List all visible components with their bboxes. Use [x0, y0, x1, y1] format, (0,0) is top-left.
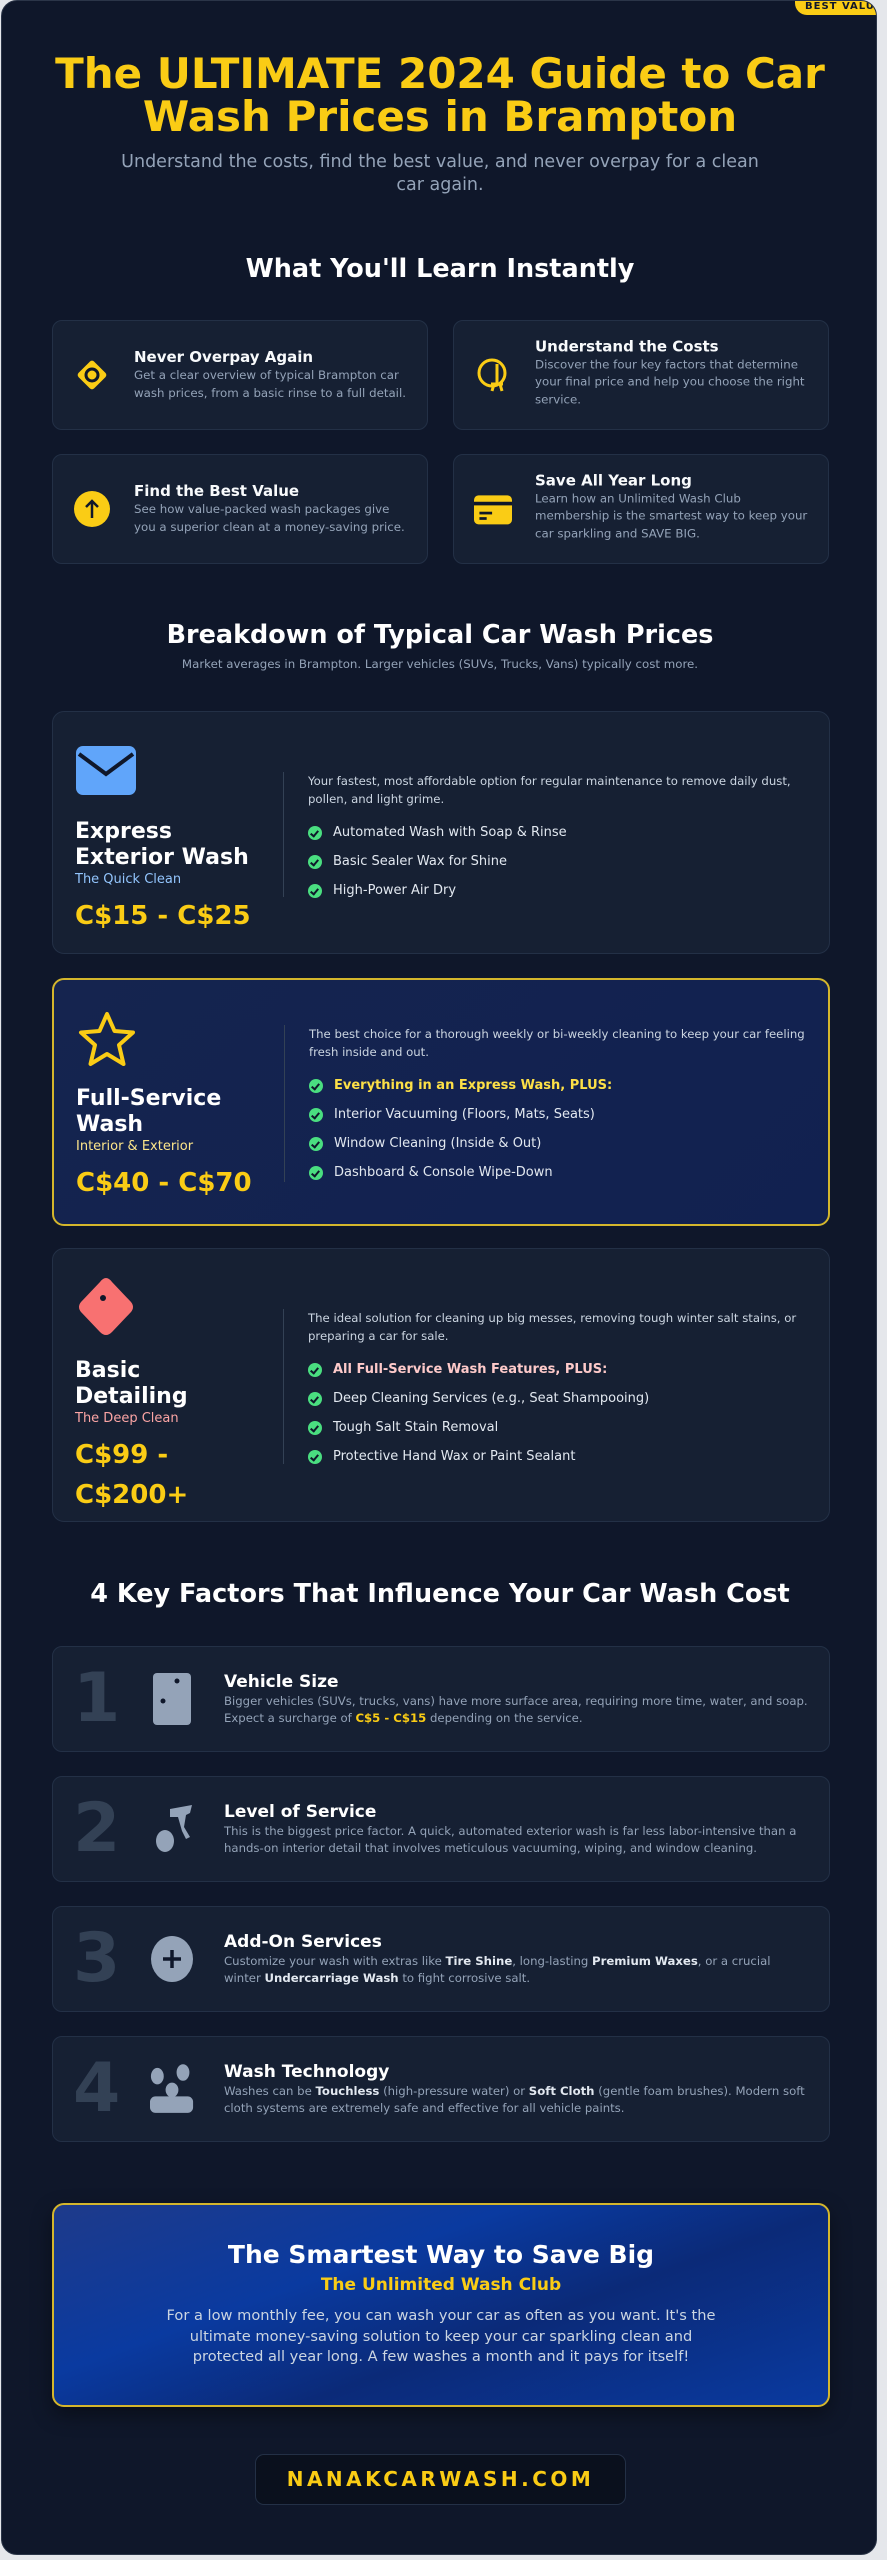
feature card: best value: you a superior clean at a money-saving price.	[134, 520, 405, 534]
factor 4: technology	[52, 2036, 830, 2142]
price card: detailing: Detailing	[75, 1384, 188, 1409]
feature card: save all year: car sparkling and SAVE BIG.	[535, 526, 700, 540]
heading: key factors: 4 Key Factors That Influence Your Car Wash Cost	[90, 1579, 790, 1609]
price card: express: Your fastest, most affordable option for regular maintenance to remove daily dust,	[308, 774, 791, 788]
feature card: understand costs: Discover the four key factors that determine	[535, 357, 798, 371]
price card: express: Express	[75, 819, 172, 844]
footer: website	[255, 2454, 626, 2505]
price card: detailing: Protective Hand Wax or Paint Sealant	[333, 1449, 575, 1464]
price card: express: Basic Sealer Wax for Shine	[333, 854, 507, 869]
feature card: save all year: membership is the smartest way to keep your	[535, 509, 807, 523]
price card: full-service: Everything in an Express Wash, PLUS:	[334, 1078, 612, 1093]
factor 2: level of service: Level of Service	[224, 1802, 376, 1822]
factor 3: add-ons	[52, 1906, 830, 2012]
title: Wash Prices in Brampton	[143, 92, 737, 141]
factor 4: technology: cloth systems are extremely safe and effective for all vehicle paints.	[224, 2101, 624, 2115]
price card: express: Automated Wash with Soap & Rinse	[333, 825, 567, 840]
feature card: save all year: Learn how an Unlimited Wash Club	[535, 491, 741, 505]
price card: detailing: Basic	[75, 1358, 140, 1383]
icon: tag diamond	[79, 1278, 133, 1335]
section subtitle: Market averages in Brampton. Larger vehicles (SUVs, Trucks, Vans) typically cost more.	[182, 657, 698, 671]
price card: full-service: C$40 - C$70	[76, 1168, 252, 1198]
feature card: understand costs: service.	[535, 392, 581, 406]
feature card: never overpay	[52, 320, 428, 430]
factor 1: vehicle size: Vehicle Size	[224, 1672, 339, 1692]
price card: detailing: Deep Cleaning Services (e.g., Seat Shampooing)	[333, 1391, 649, 1406]
icon: envelope	[76, 746, 136, 795]
factor 3: add-ons: 3	[73, 1919, 120, 1998]
icon: door	[153, 1673, 191, 1725]
heading: breakdown: Breakdown of Typical Car Wash Prices	[167, 620, 713, 650]
feature card: best value	[52, 454, 428, 564]
factor 3: add-ons: Add-On Services	[224, 1932, 382, 1952]
factor 2: level of service: 2	[73, 1789, 120, 1868]
subtitle: car again.	[396, 175, 484, 195]
price card: detailing: C$200+	[75, 1480, 188, 1510]
factor 1: vehicle size: Expect a surcharge of C$5 - C$15 depending on the service.	[224, 1711, 583, 1725]
icon: plus circle	[151, 1936, 193, 1982]
feature card: never overpay: Never Overpay Again	[134, 348, 313, 366]
promo body: protected all year long. A few washes a month and it pays for itself!	[193, 2348, 689, 2365]
factor 4: technology: Washes can be Touchless (high-pressure water) or Soft Cloth (gentle foam brushes). Modern soft	[224, 2084, 805, 2098]
price card: express: The Quick Clean	[75, 872, 181, 887]
feature card: save all year: Save All Year Long	[535, 471, 692, 489]
promo body: For a low monthly fee, you can wash your car as often as you want. It's the	[167, 2307, 715, 2324]
feature card: never overpay: Get a clear overview of typical Brampton car	[134, 368, 399, 382]
icon: card	[474, 495, 512, 524]
subtitle: Understand the costs, find the best value, and never overpay for a clean	[121, 152, 759, 172]
price card: full-service: Window Cleaning (Inside & Out)	[334, 1136, 541, 1151]
promo heading: The Smartest Way to Save Big	[228, 2240, 654, 2269]
heading: what you'll learn: What You'll Learn Instantly	[246, 254, 634, 284]
promo panel: unlimited wash club	[52, 2203, 830, 2407]
price card: express: High-Power Air Dry	[333, 883, 456, 898]
price card: express: C$15 - C$25	[75, 901, 251, 931]
factor 3: add-ons: winter Undercarriage Wash to fight corrosive salt.	[224, 1971, 530, 1985]
price card: express: Exterior Wash	[75, 845, 249, 870]
factor 1: vehicle size: 1	[73, 1659, 120, 1738]
price card: detailing: preparing a car for sale.	[308, 1329, 449, 1343]
factor 2: level of service: hands-on interior detail that involves meticulous vacuuming, wiping, and window cleaning.	[224, 1841, 757, 1855]
feature card: understand costs	[453, 320, 829, 430]
badge: best value	[795, 0, 887, 15]
factor 3: add-ons: Customize your wash with extras like Tire Shine, long-lasting Premium Waxes, or a crucial	[224, 1954, 770, 1968]
icon: up arrow circle	[74, 491, 110, 527]
feature card: understand costs: Understand the Costs	[535, 337, 719, 355]
title: The ULTIMATE 2024 Guide to Car	[55, 49, 825, 98]
factor 1: vehicle size: Bigger vehicles (SUVs, trucks, vans) have more surface area, requiring more time, water, and soap.	[224, 1694, 808, 1708]
factor 1: vehicle size	[52, 1646, 830, 1752]
price card: full-service: Full-Service	[76, 1086, 221, 1111]
feature card: never overpay: wash prices, from a basic rinse to a full detail.	[134, 386, 406, 400]
price card: detailing	[52, 1248, 830, 1522]
feature card: best value: See how value-packed wash packages give	[134, 502, 389, 516]
price card: express: pollen, and light grime.	[308, 792, 444, 806]
subtitle	[121, 152, 759, 195]
price card: full-service: Interior & Exterior	[76, 1139, 193, 1154]
promo subheading: The Unlimited Wash Club	[321, 2275, 561, 2295]
price card: detailing: C$99 -	[75, 1440, 168, 1470]
title	[55, 49, 825, 141]
price card: full-service: The best choice for a thorough weekly or bi-weekly cleaning to keep your car feeling	[309, 1027, 805, 1041]
price card: full-service: Interior Vacuuming (Floors, Mats, Seats)	[334, 1107, 595, 1122]
price card: full-service: Dashboard & Console Wipe-Down	[334, 1165, 553, 1180]
icon: star	[78, 1012, 135, 1066]
price card: express	[52, 711, 830, 954]
promo body	[167, 2307, 715, 2365]
icon: diamond	[78, 360, 106, 390]
price card: detailing: Tough Salt Stain Removal	[333, 1420, 498, 1435]
feature card: save all year	[453, 454, 829, 564]
price card: full-service: fresh inside and out.	[309, 1045, 429, 1059]
feature card: understand costs: your final price and help you choose the right	[535, 375, 805, 389]
footer: website: NANAKCARWASH.COM	[287, 2467, 594, 2491]
icon: people	[150, 2064, 194, 2113]
price card: full-service: Wash	[76, 1112, 143, 1137]
price card: full-service	[52, 978, 830, 1226]
feature card: best value: Find the Best Value	[134, 482, 299, 500]
price card: detailing: All Full-Service Wash Features, PLUS:	[333, 1362, 607, 1377]
icon: gauge	[478, 358, 506, 392]
factor 2: level of service	[52, 1776, 830, 1882]
factor 4: technology: Wash Technology	[224, 2062, 389, 2082]
icon: spray	[156, 1805, 192, 1852]
promo body: ultimate money-saving solution to keep your car sparkling clean and	[190, 2328, 692, 2344]
price card: detailing: The Deep Clean	[75, 1411, 179, 1426]
factor 4: technology: 4	[73, 2049, 120, 2128]
factor 2: level of service: This is the biggest price factor. A quick, automated exterior wash is far less labor-intensive than a	[224, 1824, 796, 1838]
price card: detailing: The ideal solution for cleaning up big messes, removing tough winter salt stains, or	[308, 1311, 796, 1325]
